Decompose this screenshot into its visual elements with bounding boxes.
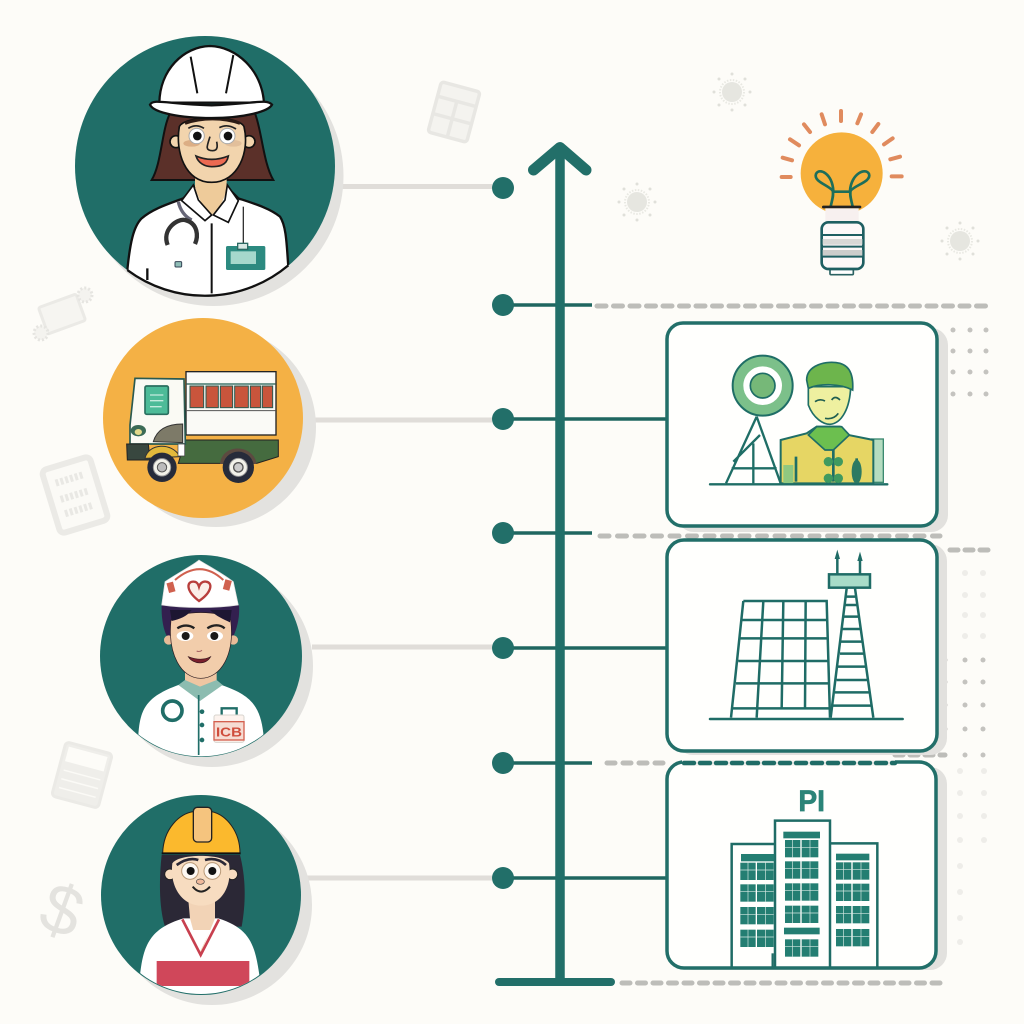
icon: calculator top xyxy=(428,82,480,142)
base bar xyxy=(499,978,611,986)
icon: laptop with gears xyxy=(34,288,92,340)
dashed top overlay xyxy=(684,761,895,765)
dot grids xyxy=(942,328,988,758)
arrow head xyxy=(534,148,586,170)
faint dot grids xyxy=(957,570,987,945)
grey connector lines xyxy=(306,186,492,878)
icon: dollar sign: $ xyxy=(30,867,94,953)
icon: virus near arrow xyxy=(618,182,656,222)
vertical arrow xyxy=(555,150,565,982)
dashed grey guide lines xyxy=(597,306,990,983)
card top edge gap xyxy=(682,760,895,766)
timeline dots xyxy=(492,177,514,889)
avatar: engineer doctor xyxy=(75,36,344,317)
icon: virus right xyxy=(940,222,980,260)
panel: radar and worker card xyxy=(667,323,948,532)
avatar: delivery truck xyxy=(103,318,316,527)
timeline axis xyxy=(492,148,667,982)
icon: virus top right xyxy=(712,72,752,112)
decorative background icons xyxy=(30,72,979,953)
icon: calculator lower xyxy=(52,742,112,808)
icon: hospital building xyxy=(732,785,877,967)
avatar: woman with yellow hard hat xyxy=(101,795,312,1005)
panel: solar panel and tower card xyxy=(667,540,947,755)
teal branch lines xyxy=(503,305,667,878)
icon: hospital building: PI xyxy=(798,785,825,818)
icon: light bulb with sprout xyxy=(782,111,902,275)
avatar: medic in heart cap xyxy=(100,555,313,778)
avatar: medic in heart cap: ICB xyxy=(216,724,242,739)
panel: hospital building card xyxy=(667,762,947,970)
icon: tablet xyxy=(41,456,109,534)
